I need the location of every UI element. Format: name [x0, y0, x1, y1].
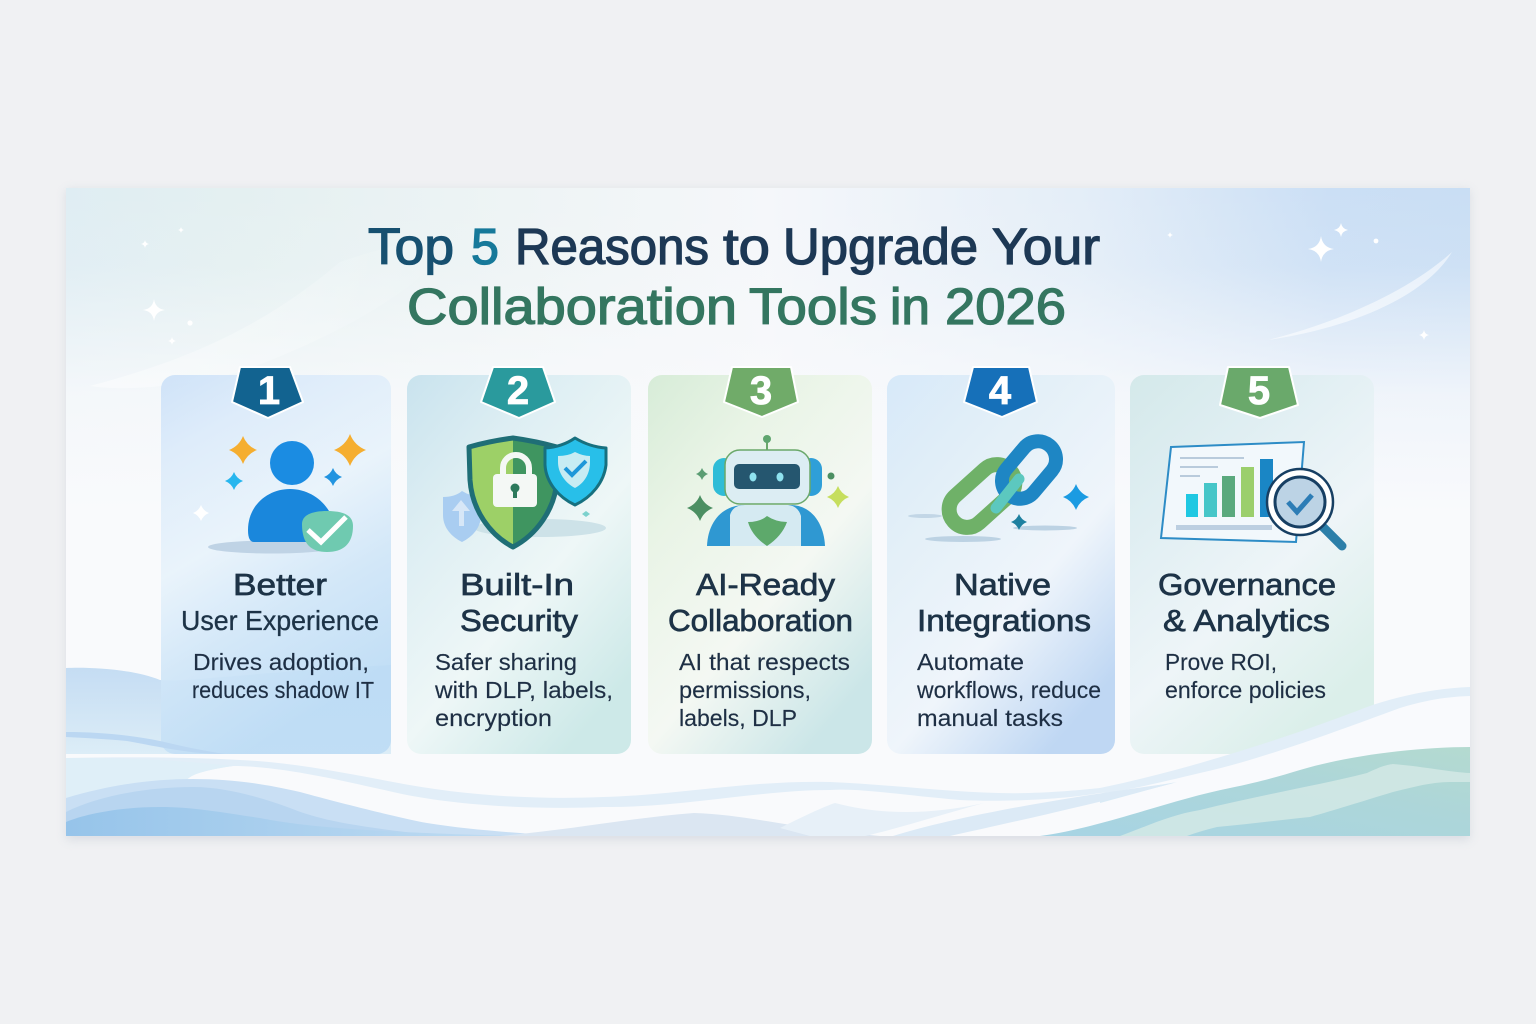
right wave [1040, 747, 1470, 836]
card heading: Native [954, 567, 1051, 602]
card description [192, 649, 374, 703]
card heading: Governance [1158, 567, 1336, 602]
title line 1: Reasons [515, 218, 709, 275]
card heading: Better [233, 567, 327, 602]
left ribbon [66, 732, 207, 752]
icon: chain links [908, 434, 1089, 542]
card description: workflows, reduce [916, 677, 1101, 703]
sparkle [169, 338, 176, 344]
vertical fade to white [66, 279, 1470, 836]
card heading: User Experience [181, 605, 379, 636]
card 5: governance and analytics [1130, 367, 1374, 754]
card heading [668, 567, 853, 638]
card heading [1158, 567, 1336, 638]
card 3: ai-ready collaboration [648, 367, 872, 754]
icon: dashboard and magnifier [1161, 442, 1342, 546]
foreground waves [66, 687, 1470, 836]
infographic page [64, 188, 1472, 842]
card description [916, 649, 1101, 731]
card description [679, 649, 850, 731]
number badge 4 [964, 367, 1037, 417]
card description: Drives adoption, [193, 649, 369, 675]
sparkles background [141, 223, 1429, 345]
title [368, 218, 1100, 335]
white area under right ribbon [1270, 718, 1374, 754]
title line 2 [407, 278, 1066, 335]
card description [434, 649, 613, 731]
card description: encryption [435, 705, 552, 731]
card heading: Security [460, 603, 579, 638]
card background [1130, 375, 1374, 754]
card background [648, 375, 872, 754]
bottom left light wave [66, 779, 560, 836]
card 1: better user experience [161, 367, 391, 754]
number badge 5 [1220, 367, 1298, 418]
top left swoosh [90, 232, 460, 388]
card 2: built-in security [407, 367, 631, 754]
card background [161, 375, 391, 754]
title line 2: 2026 [945, 278, 1066, 335]
number badge 4: 4 [989, 369, 1012, 413]
streak ribbon center right [893, 783, 1174, 836]
number badge 2: 2 [507, 369, 529, 413]
center hump [500, 813, 880, 836]
card description: Prove ROI, [1165, 649, 1277, 675]
title line 1: Your [992, 218, 1100, 275]
title line 2: Collaboration [407, 278, 737, 335]
sparkle [144, 300, 164, 320]
number badge 1 [232, 367, 303, 418]
panel shadow [66, 190, 1470, 840]
card background [887, 375, 1115, 754]
icon: shields and lock [443, 438, 606, 547]
card description: Automate [917, 649, 1024, 675]
sparkle [1308, 236, 1334, 262]
number badge 3: 3 [750, 369, 772, 413]
card description: Safer sharing [435, 649, 577, 675]
card description: labels, DLP [679, 705, 797, 731]
card 4: native integrations [887, 367, 1115, 754]
card heading: AI-Ready [696, 567, 836, 602]
center pale peak [780, 803, 984, 836]
card description: AI that respects [679, 649, 850, 675]
left wave behind cards [66, 665, 391, 754]
card background [407, 375, 631, 754]
pale band across bottom [66, 687, 1470, 808]
title line 1: Upgrade [783, 218, 978, 275]
title line 2: in [890, 278, 930, 335]
left pale fill [180, 770, 210, 780]
card description: enforce policies [1165, 677, 1326, 703]
card heading: Integrations [917, 603, 1091, 638]
number badge 3 [724, 367, 798, 417]
number badge 1: 1 [258, 369, 280, 413]
card description: permissions, [679, 677, 811, 703]
title line 2: Tools [749, 278, 877, 335]
dot [1374, 239, 1378, 243]
top right swoosh [1268, 252, 1452, 340]
number badge 2 [481, 367, 555, 418]
title line 1: to [723, 218, 770, 275]
title line 1: Top [368, 218, 454, 275]
card heading [917, 567, 1091, 638]
base wash [66, 188, 1470, 376]
card description: reduces shadow IT [192, 677, 374, 703]
card description [1165, 649, 1326, 703]
icon: user with check [193, 434, 366, 554]
card heading: Built-In [460, 567, 574, 602]
card heading [460, 567, 579, 638]
right wave highlight [1120, 764, 1470, 836]
icon: robot [687, 435, 849, 546]
number badge 5: 5 [1248, 369, 1270, 413]
title line 1: 5 [471, 218, 499, 275]
card heading: & Analytics [1163, 603, 1330, 638]
sparkle [1334, 224, 1348, 236]
card description: with DLP, labels, [434, 677, 613, 703]
bottom left mid wave [66, 787, 404, 832]
dot [187, 320, 193, 326]
lower right pale streak [1100, 782, 1177, 803]
sparkle [1420, 330, 1428, 340]
sparkle [1168, 232, 1172, 238]
card heading: Collaboration [668, 603, 853, 638]
card description: manual tasks [917, 705, 1063, 731]
title line 1 [368, 218, 1100, 275]
sparkle [178, 228, 184, 232]
sparkle [142, 240, 148, 248]
card heading [181, 567, 379, 636]
bottom left deep wave [66, 807, 520, 836]
panel background [66, 188, 1470, 836]
